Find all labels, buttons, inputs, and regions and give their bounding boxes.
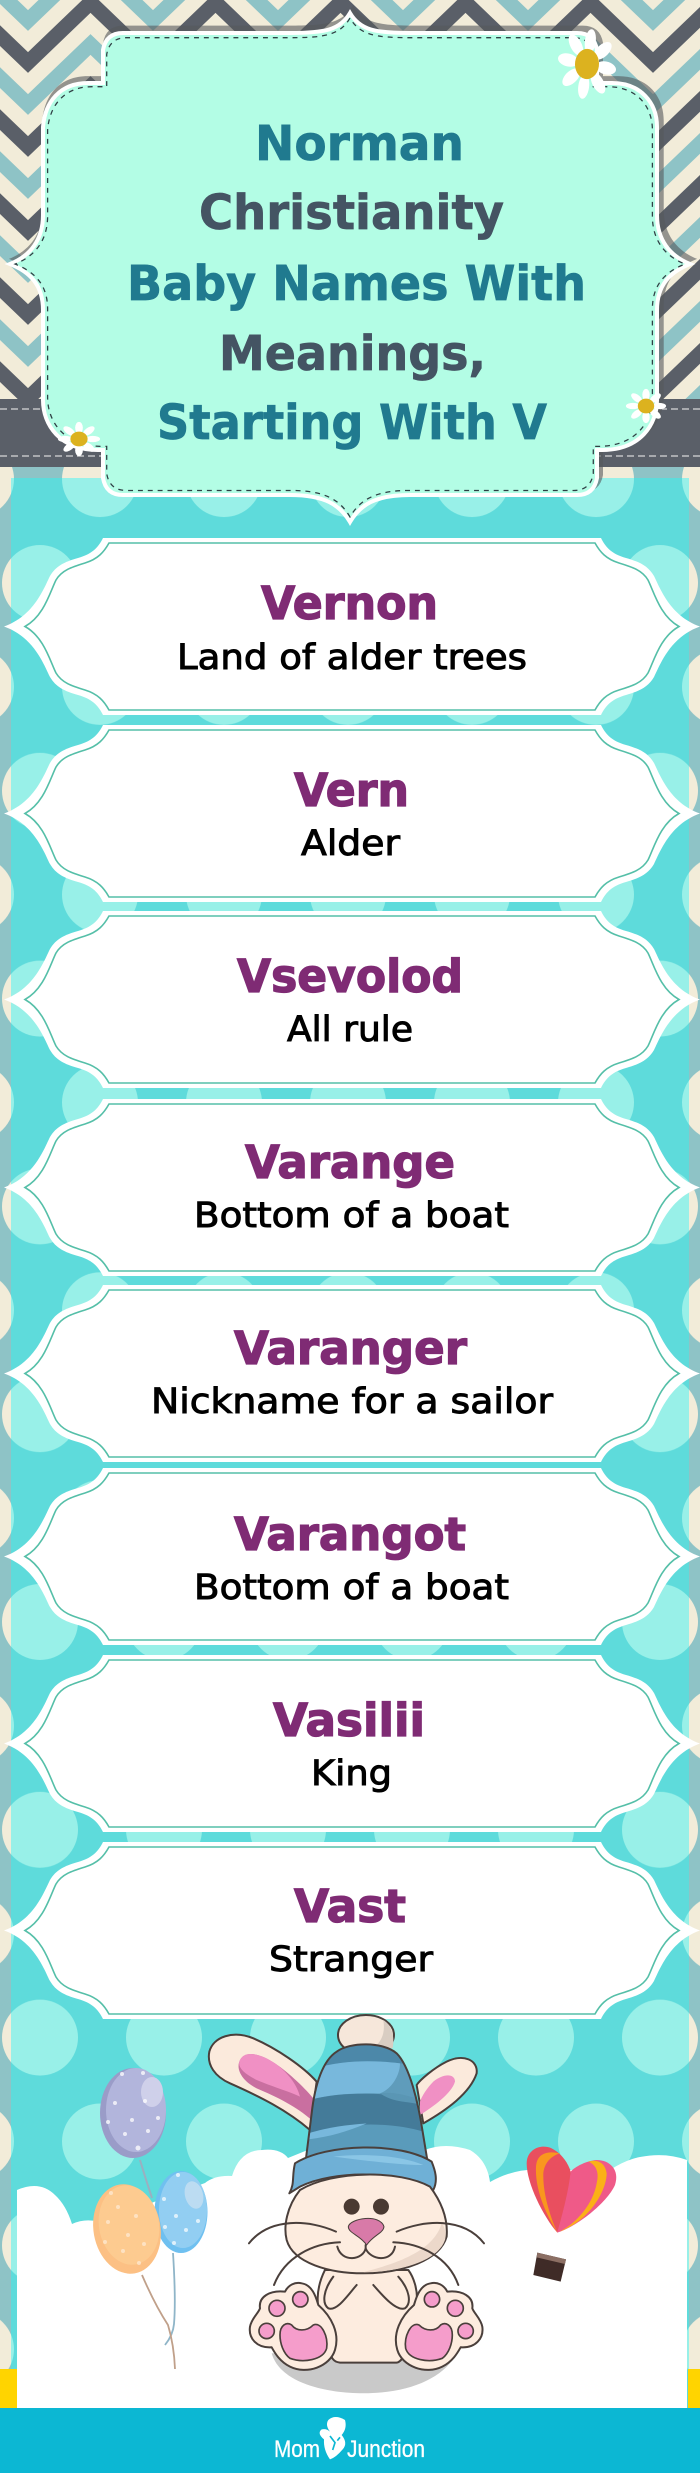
card: Varange: Bottom of a boat — [194, 1196, 509, 1236]
card: Vern — [4, 725, 700, 902]
card: Vsevolod — [4, 911, 700, 1088]
bunny left foot — [250, 2283, 336, 2370]
card: Vernon: Land of alder trees — [177, 638, 527, 678]
logo icon — [320, 2417, 346, 2459]
background: chevron pattern — [0, 0, 700, 400]
card: Varangot: Varangot — [234, 1508, 466, 1561]
title: Meanings, — [219, 326, 486, 382]
bunny body — [318, 2270, 417, 2363]
bunny head — [249, 2175, 484, 2285]
card: Vern: Alder — [301, 824, 401, 864]
yellow corner strips — [0, 2369, 700, 2408]
logo: MomJunction — [274, 2417, 425, 2463]
icon: daisy top right — [553, 23, 621, 105]
bunny right foot — [396, 2283, 483, 2370]
title: Norman — [255, 116, 464, 172]
card: Vern: Vern — [294, 764, 409, 817]
title: Baby Names With — [127, 256, 586, 312]
card: Vernon: Vernon — [261, 577, 438, 630]
bunny shadow — [272, 2353, 455, 2393]
card: Vasilii — [4, 1655, 700, 1832]
card: Vast: Vast — [294, 1880, 406, 1933]
card: Vsevolod: All rule — [287, 1010, 413, 1050]
card: Vernon — [4, 538, 700, 715]
bunny left ear — [209, 2035, 317, 2130]
card: Varangot: Bottom of a boat — [194, 1568, 509, 1608]
ribbon band — [0, 399, 700, 467]
card: Vsevolod: Vsevolod — [237, 950, 463, 1003]
card: Vasilii: King — [311, 1754, 392, 1794]
card: Varangot — [4, 1468, 700, 1645]
clouds — [17, 2145, 687, 2408]
card: Varanger: Varanger — [234, 1322, 468, 1375]
icon: daisy left — [58, 422, 100, 456]
title — [127, 116, 586, 451]
card: Varanger: Nickname for a sailor — [151, 1382, 554, 1422]
logo: MomJunction: Mom — [274, 2436, 320, 2463]
background: polka dot panel — [0, 467, 700, 2408]
bunny hat — [289, 2040, 436, 2193]
bunny right ear — [417, 2058, 477, 2123]
header frame — [9, 5, 697, 522]
card: Vast: Stranger — [269, 1940, 434, 1980]
title: Starting With V — [157, 395, 547, 451]
card: Vast — [4, 1842, 700, 2019]
icon: daisy right — [626, 389, 666, 423]
card: Varange — [4, 1099, 700, 1276]
card: Varange: Varange — [245, 1136, 455, 1189]
card: Varanger — [4, 1285, 700, 1462]
logo: MomJunction: Junction — [347, 2436, 425, 2463]
footer band — [0, 2408, 700, 2473]
title: Christianity — [199, 185, 504, 241]
card: Vasilii: Vasilii — [273, 1694, 425, 1747]
icon: orange balloon — [86, 2179, 175, 2369]
icon: blue balloon — [154, 2171, 208, 2345]
icon: purple balloon — [100, 2068, 166, 2198]
bunny pom-pom — [338, 2015, 394, 2055]
icon: bunny with hat — [209, 2015, 484, 2393]
icon: heart hot air balloon — [527, 2147, 616, 2282]
